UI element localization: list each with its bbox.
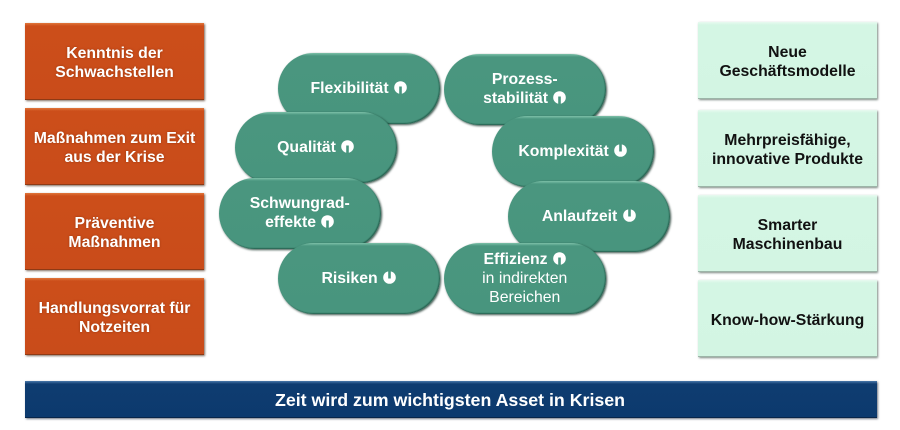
box: Smarter Maschinenbau: Smarter (758, 217, 817, 234)
panel: central ring of pills (218, 52, 673, 317)
box: Kenntnis der Schwachstellen: Schwachstellen (55, 64, 174, 81)
box: Präventive Maßnahmen (25, 193, 204, 270)
pill: Effizienz in indirekten Bereichen: in indirekten (482, 270, 567, 287)
pill: Komplexität: Komplexität (518, 143, 609, 160)
box: Neue Geschäftsmodelle (698, 22, 877, 99)
box: Maßnahmen zum Exit (25, 108, 204, 185)
box: Smarter Maschinenbau: Maschinenbau (733, 236, 842, 253)
box: Maßnahmen zum Exit: aus der Krise (64, 149, 165, 166)
panel: left column (24, 22, 206, 358)
box: Maßnahmen zum Exit: Maßnahmen zum Exit (34, 130, 195, 147)
pill: Qualität (235, 112, 396, 182)
box: Mehrpreisfähige Produkte: innovative Produkte (712, 151, 863, 168)
box: Präventive Maßnahmen: Präventive (75, 215, 154, 232)
box: Kenntnis der Schwachstellen: Kenntnis der (66, 45, 163, 62)
pill: Effizienz in indirekten Bereichen (444, 243, 606, 314)
pill: Schwungradeffekte: Schwungrad- (250, 195, 350, 212)
pill: Flexibilität (278, 53, 440, 124)
box: Kenntnis der Schwachstellen (25, 23, 204, 100)
box: Mehrpreisfähige Produkte (698, 110, 877, 187)
box: Smarter Maschinenbau (698, 195, 877, 272)
panel: right column (698, 22, 880, 360)
box: Know-how-Stärkung: Know-how-Stärkung (711, 312, 864, 328)
pill: Prozessstabilität (444, 54, 606, 124)
box: Präventive Maßnahmen: Maßnahmen (68, 234, 161, 251)
pill: Schwungradeffekte (219, 178, 380, 248)
pill: Effizienz in indirekten Bereichen: Effizienz (484, 251, 548, 268)
pill: Risiken: Risiken (321, 270, 378, 287)
banner: Zeit wird zum wichtigsten Asset in Krisen: Zeit wird zum wichtigsten Asset in Krisen (275, 390, 625, 410)
pill: Anlaufzeit (508, 181, 670, 252)
pill: Schwungradeffekte: effekte (265, 214, 316, 231)
box: Handlungsvorrat: Notzeiten (79, 319, 150, 336)
box: Know-how-Stärkung (698, 280, 877, 357)
box: Mehrpreisfähige Produkte: Mehrpreisfähige, (724, 132, 851, 149)
pill: Qualität: Qualität (277, 139, 336, 156)
banner: Zeit wird zum wichtigsten Asset in Krisen (25, 381, 877, 418)
pill: Prozessstabilität: stabilität (483, 90, 548, 107)
pill: Anlaufzeit: Anlaufzeit (542, 208, 617, 225)
box: Handlungsvorrat: Handlungsvorrat für (39, 300, 190, 317)
box: Neue Geschäftsmodelle: Geschäftsmodelle (719, 63, 856, 80)
pill: Komplexität (492, 116, 654, 186)
box: Handlungsvorrat (25, 278, 204, 355)
pill: Flexibilität: Flexibilität (310, 80, 389, 97)
pill: Risiken (278, 243, 440, 314)
pill: Prozessstabilität: Prozess- (492, 71, 558, 88)
box: Neue Geschäftsmodelle: Neue (768, 44, 807, 61)
pill: Effizienz in indirekten Bereichen: Bereichen (489, 289, 560, 306)
